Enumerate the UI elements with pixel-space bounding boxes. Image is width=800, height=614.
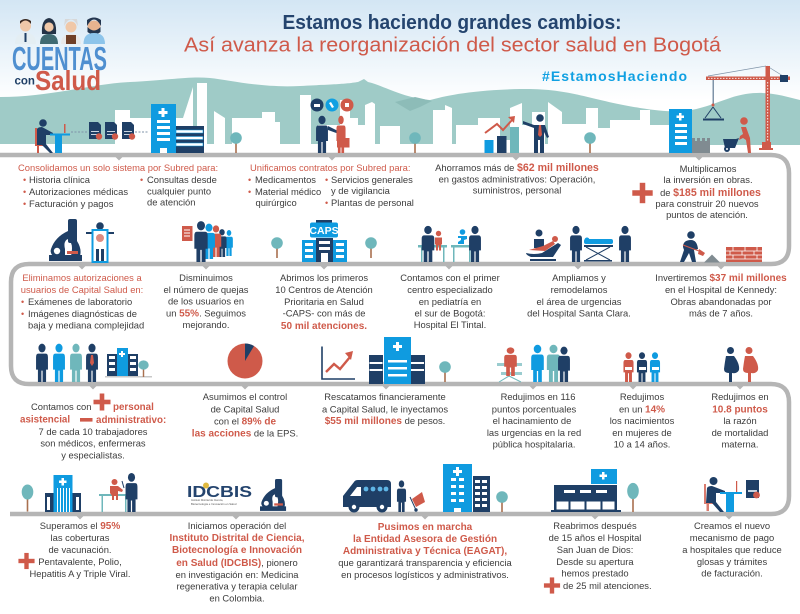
text: Unificamos: Medicamentos (255, 174, 316, 185)
text: Consolidamos: • (140, 175, 143, 185)
text: Disminuimos: Disminuimos (179, 272, 233, 283)
icon: person with trolley (397, 480, 425, 512)
text: Invertiremos: en el Hospital de Kennedy: (665, 284, 777, 295)
hashtag: #EstamosHaciendo (542, 68, 687, 84)
text: IDCBIS: Iniciamos operación del (188, 520, 286, 531)
logo: Cuentas con Salud: con (14, 76, 35, 88)
track pointers (76, 156, 744, 520)
icon: pregnant women (724, 347, 758, 382)
text: Redujimos 14: en mujeres de (612, 427, 672, 438)
text: Multiplicamos: Multiplicamos (680, 163, 737, 174)
logo: Cuentas con Salud (12, 18, 107, 96)
icon: pediatric care (418, 226, 481, 262)
icon: hospital EAGAT (443, 464, 490, 512)
darker mountain (395, 97, 432, 111)
text: Reabrimos: Desde su apertura (556, 556, 634, 567)
text: Superamos: las coberturas (51, 532, 110, 543)
icon: queue of users (182, 221, 233, 262)
chart: pie 89 percent (228, 344, 262, 378)
text: Abrimos: Abrimos los primeros (280, 272, 368, 283)
text: Asumimos: las acciones de la EPS. (192, 428, 298, 440)
text: Contamos pediatria: el sur de Bogotá: (415, 308, 485, 318)
text: Unificamos: y de vigilancia (331, 185, 391, 196)
icon: three women (623, 352, 660, 382)
text: Reabrimos: hemos prestado (561, 568, 629, 578)
icon: vaccination hospital (45, 475, 81, 512)
text: Eliminamos: Exámenes de laboratorio (28, 296, 132, 307)
text: Pusimos: Pusimos en marcha (378, 522, 473, 533)
logo: Cuentas con Salud: CUENTAS (12, 40, 107, 77)
text: Multiplicamos: para construir 20 nuevos (655, 198, 759, 209)
text: Contamos pediatria (400, 272, 500, 330)
text: Reabrimos: de 25 mil atenciones. (563, 580, 652, 591)
text: Ampliamos: remodelamos (551, 284, 608, 295)
icon: worker and bricks (680, 231, 762, 262)
text: Consolidamos: Facturación y pagos (29, 198, 114, 209)
text: Consolidamos: cualquier punto (147, 186, 211, 196)
text: Creamos: a hospitales que reduce (682, 544, 782, 555)
text: IDCBIS: en investigación en: Medicina (176, 569, 299, 580)
text: Unificamos: • (248, 187, 251, 197)
text: Abrimos: 10 Centros de Atención (275, 284, 373, 295)
text: Unificamos: • (325, 198, 328, 208)
text: Consolidamos: • (23, 175, 26, 185)
text: Redujimos 116: Redujimos en 116 (501, 391, 575, 402)
text: Consolidamos: • (23, 187, 26, 197)
text: Unificamos: • (248, 175, 251, 185)
icon: rising chart and buildings (322, 337, 451, 384)
text: Eliminamos: usuarios de Capital Salud en: (21, 284, 143, 295)
text: personal asistencial: son médicos, enfermeras (40, 438, 146, 448)
text: Superamos: Superamos el 95% (40, 520, 120, 532)
text: Reabrimos: de 15 años el Hospital (549, 532, 641, 543)
logo: IDCBIS: Biotecnología e Innovación en Salud (191, 502, 237, 506)
text: Creamos: de facturación. (701, 568, 763, 578)
icon: tree (22, 484, 33, 512)
title (184, 12, 722, 56)
text: Contamos pediatria: Contamos con el primer (400, 272, 500, 283)
text: Superamos: de vacunación. (48, 544, 112, 555)
text: Disminuimos: de los usuarios en (168, 296, 244, 306)
text: Ampliamos (527, 272, 631, 318)
text: Ahorramos: Ahorramos más de $62 mil millones (435, 162, 599, 174)
text: Redujimos 116: las urgencias en la red (487, 427, 581, 438)
text: Unificamos: Unificamos contratos por Subred para: (250, 162, 410, 173)
icon: CAPS centers: CAPS (309, 225, 339, 237)
icon: handshake (310, 98, 354, 153)
text: Reabrimos (544, 520, 652, 594)
text: Redujimos 10.8 (711, 391, 769, 450)
text: Creamos (682, 520, 782, 578)
icon: CAPS centers (271, 220, 377, 262)
text: Multiplicamos: puntos de atención. (666, 209, 748, 220)
text: Redujimos 116: pública hospitalaria. (493, 438, 575, 450)
icon: hospital with stacked block (151, 104, 204, 153)
title: Estamos haciendo grandes cambios: (282, 12, 622, 34)
mountains (0, 77, 800, 146)
text: Rescatamos: Rescatamos financieramente (324, 391, 446, 402)
text: Eliminamos (21, 272, 144, 330)
text: Consolidamos: • (23, 199, 26, 209)
text: Contamos pediatria: Hospital El Tintal. (414, 319, 486, 330)
text: Redujimos 14: los nacimientos (610, 415, 675, 426)
text: personal asistencial: 7 de cada 10 trabajadores (39, 426, 148, 437)
text: personal asistencial (20, 394, 166, 460)
icon: tree (409, 132, 421, 153)
icon: man pointing (523, 114, 549, 153)
white lower page (0, 145, 800, 614)
icon: worker with wheelbarrow (723, 117, 751, 153)
icon: growth bars and arrow (484, 116, 519, 153)
text: Rescatamos: $55 mil millones de pesos. (325, 415, 445, 427)
icon: Hospital San Juan de Dios (551, 469, 621, 512)
text: Unificamos: • (325, 175, 328, 185)
text: Superamos: Pentavalente, Polio, (38, 556, 122, 567)
logo: Cuentas con Salud: Salud (35, 65, 101, 96)
text: Rescatamos: a Capital Salud, le inyectamos (322, 404, 448, 414)
text: Redujimos 10.8: 10.8 puntos (712, 404, 768, 416)
text: Redujimos 10.8: de mortalidad (712, 427, 768, 438)
text: Pusimos: en procesos logísticos y administrativos. (341, 569, 509, 580)
text: Ampliamos: Ampliamos y (552, 272, 606, 283)
text: Consolidamos (18, 162, 218, 209)
text: Multiplicamos: de $185 mil millones (660, 187, 761, 199)
text: Consolidamos: Consolidamos un solo sistema por Subred para: (18, 162, 218, 173)
text: Ampliamos: del Hospital Santa Clara. (527, 308, 631, 318)
text: IDCBIS: en Salud (IDCBIS), pionero (176, 557, 298, 569)
icon: person at desk with bill (704, 477, 760, 512)
text: Pusimos: que garantizará transparencia y eficiencia (338, 557, 513, 568)
text: IDCBIS: regenerativa y terapia celular (177, 580, 297, 592)
text: Eliminamos: • (21, 297, 24, 307)
title: Así avanza la reorganización del sector salud en Bogotá (184, 34, 722, 56)
text: Contamos pediatria: centro especializado (407, 284, 493, 295)
text: Unificamos: quirúrgico (256, 197, 297, 208)
icon: microscope and x-ray (49, 219, 114, 262)
text: Consolidamos: Consultas desde (147, 174, 217, 185)
text: Eliminamos: • (21, 309, 24, 319)
text: Consolidamos: de atención (147, 196, 195, 208)
text: Disminuimos (164, 272, 249, 330)
text: Disminuimos: un 55%. Seguimos (166, 308, 246, 320)
text: Multiplicamos: la inversión en obras. (663, 174, 753, 185)
text: Creamos: glosas y trámites (697, 556, 767, 567)
text: Consolidamos: Autorizaciones médicas (29, 186, 128, 197)
text: Consolidamos: Historia clínica (29, 174, 91, 185)
icon: emergency stretcher (526, 226, 631, 262)
icon: tree (230, 132, 242, 153)
text: Unificamos: Material médico (255, 186, 321, 197)
text: Superamos (18, 520, 130, 579)
text: Reabrimos: San Juan de Dios: (557, 544, 633, 555)
text: Invertiremos (655, 272, 787, 318)
text: Asumimos: con el 89% de (214, 416, 276, 428)
text: personal asistencial: Contamos con (31, 401, 91, 412)
text: Contamos pediatria: en pediatría en (419, 296, 481, 307)
icon: ambulance (343, 480, 391, 512)
text: Redujimos 116: puntos porcentuales (492, 404, 577, 414)
text: Disminuimos: mejorando. (183, 319, 229, 330)
text: Pusimos: la Entidad Asesora de Gestión (353, 534, 497, 545)
text: Redujimos 14: Redujimos (620, 391, 664, 402)
text: personal asistencial: y especialistas. (61, 450, 125, 460)
text: Pusimos: Administrativa y Técnica (EAGAT), (343, 546, 507, 557)
track line (0, 155, 789, 514)
crane (703, 66, 790, 150)
icon: person at desk with documents (35, 119, 149, 153)
text: Unificamos: Plantas de personal (331, 197, 414, 208)
icon: child vaccination (99, 473, 137, 512)
logo figures (15, 18, 105, 44)
icon: health staff and building (36, 344, 152, 382)
text: Pusimos (338, 522, 513, 580)
sky background (0, 0, 800, 100)
text: Multiplicamos (632, 163, 761, 220)
text: Ahorramos: suministros, personal (473, 184, 561, 196)
text: IDCBIS (169, 520, 305, 604)
text: Redujimos 14: en un 14% (619, 404, 665, 416)
text: Redujimos 10.8: materna. (722, 438, 758, 450)
icon: tree (627, 483, 639, 512)
skyline (0, 83, 670, 150)
logo: IDCBIS: IDCBIS (187, 484, 252, 501)
text: Redujimos 14 (610, 391, 675, 450)
text: Invertiremos: Invertiremos $37 mil millones (655, 272, 787, 284)
text: Disminuimos: el número de quejas (164, 284, 249, 295)
text: Invertiremos: Obras abandonadas por (670, 296, 772, 307)
text: personal asistencial: personal (113, 402, 154, 413)
text: Redujimos 116: el hacinamiento de (493, 415, 571, 426)
text: Abrimos (275, 272, 373, 332)
icon: tree (496, 491, 508, 512)
text: Unificamos: Servicios generales (331, 174, 413, 185)
text: Asumimos (192, 391, 298, 440)
text: Asumimos: Asumimos el control (203, 391, 287, 402)
text: Redujimos 10.8: la razón (723, 415, 757, 426)
text: IDCBIS: Biotecnología e Innovación (172, 545, 302, 556)
text: Superamos: Hepatitis A y Triple Viral. (30, 568, 130, 579)
logo: IDCBIS: Instituto Distrital de Ciencia, (191, 498, 223, 502)
text: Abrimos: 50 mil atenciones. (281, 321, 367, 332)
text: Invertiremos: más de 7 años. (689, 308, 753, 318)
text: Eliminamos: Imágenes diagnósticas de (28, 308, 137, 319)
text: Abrimos: -CAPS- con más de (283, 308, 365, 318)
text: Ahorramos: en gastos administrativos: Operación, (439, 174, 595, 184)
text: Eliminamos: Eliminamos autorizaciones a (22, 272, 142, 283)
text: Abrimos: Prioritaria en Salud (284, 296, 364, 307)
text: personal asistencial: administrativo: (96, 415, 166, 426)
text: Rescatamos (322, 391, 448, 427)
text: Asumimos: de Capital Salud (211, 404, 279, 414)
text: Redujimos 14: 10 a 14 años. (614, 438, 670, 450)
logo: IDCBIS (187, 482, 252, 506)
text: Reabrimos: Reabrimos después (553, 520, 637, 531)
text: Creamos: Creamos el nuevo (694, 520, 770, 531)
text: Ahorramos (435, 162, 599, 196)
icon: microscope (260, 479, 286, 511)
icon: patients and staff (497, 345, 570, 382)
text: IDCBIS: Instituto Distrital de Ciencia, (169, 533, 305, 544)
text: Redujimos 10.8: Redujimos en (711, 391, 769, 402)
icon: hospital and fence (669, 109, 710, 153)
text: Ampliamos: el área de urgencias (537, 296, 622, 307)
text: Unificamos (248, 162, 414, 208)
icon: tree (584, 132, 596, 153)
text: IDCBIS: en Colombia. (209, 592, 265, 604)
text: Creamos: mecanismo de pago (690, 532, 774, 543)
text: personal asistencial: asistencial (20, 414, 70, 426)
text: Redujimos 116 (487, 391, 581, 450)
text: Eliminamos: baja y mediana complejidad (28, 320, 144, 330)
